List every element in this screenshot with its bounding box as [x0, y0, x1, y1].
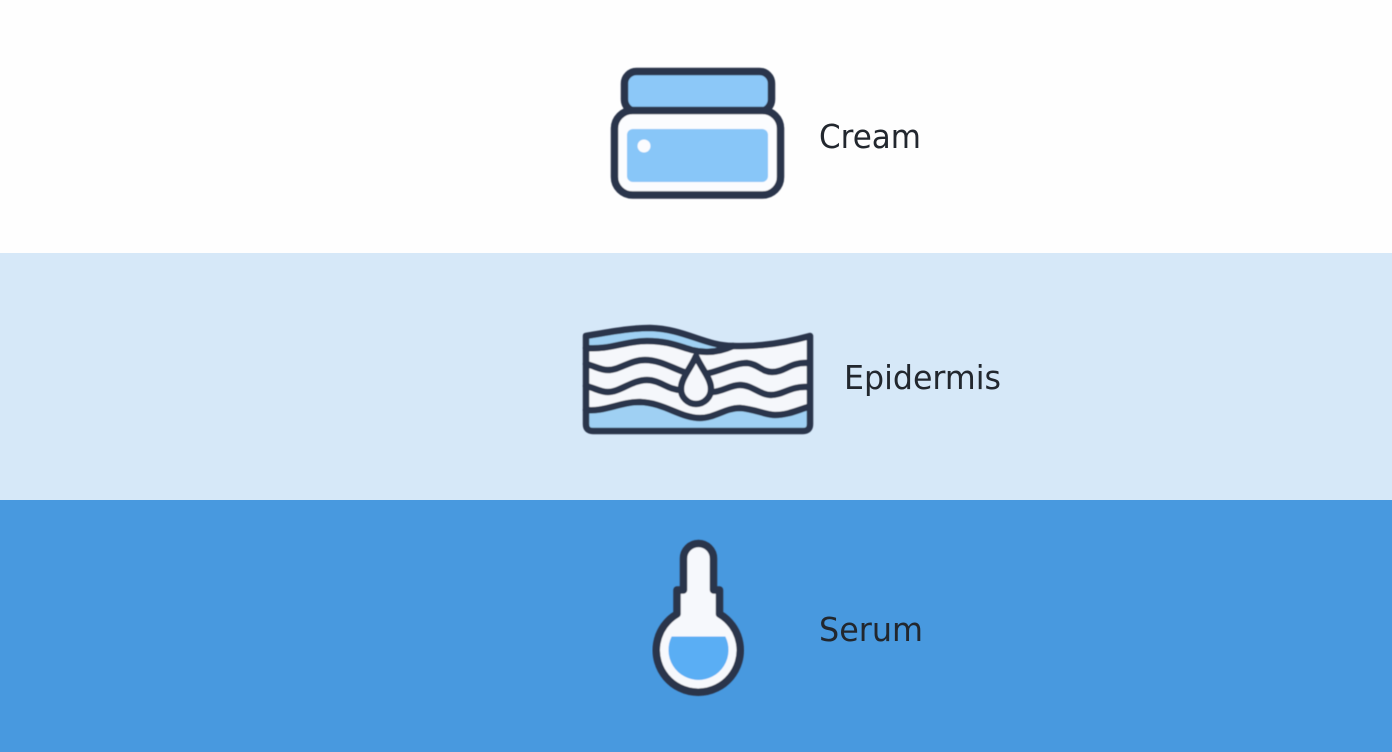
icon: cream jar [614, 72, 780, 195]
panel: cream band [0, 0, 1392, 253]
icon: epidermis layers with drop [586, 328, 810, 431]
icon: serum dropper bottle [656, 544, 740, 692]
label: epidermis: Epidermis [844, 358, 1001, 397]
panel: serum band [0, 500, 1392, 752]
label: cream: Cream [819, 117, 921, 156]
label: serum: Serum [819, 610, 923, 649]
panel: epidermis band [0, 253, 1392, 500]
